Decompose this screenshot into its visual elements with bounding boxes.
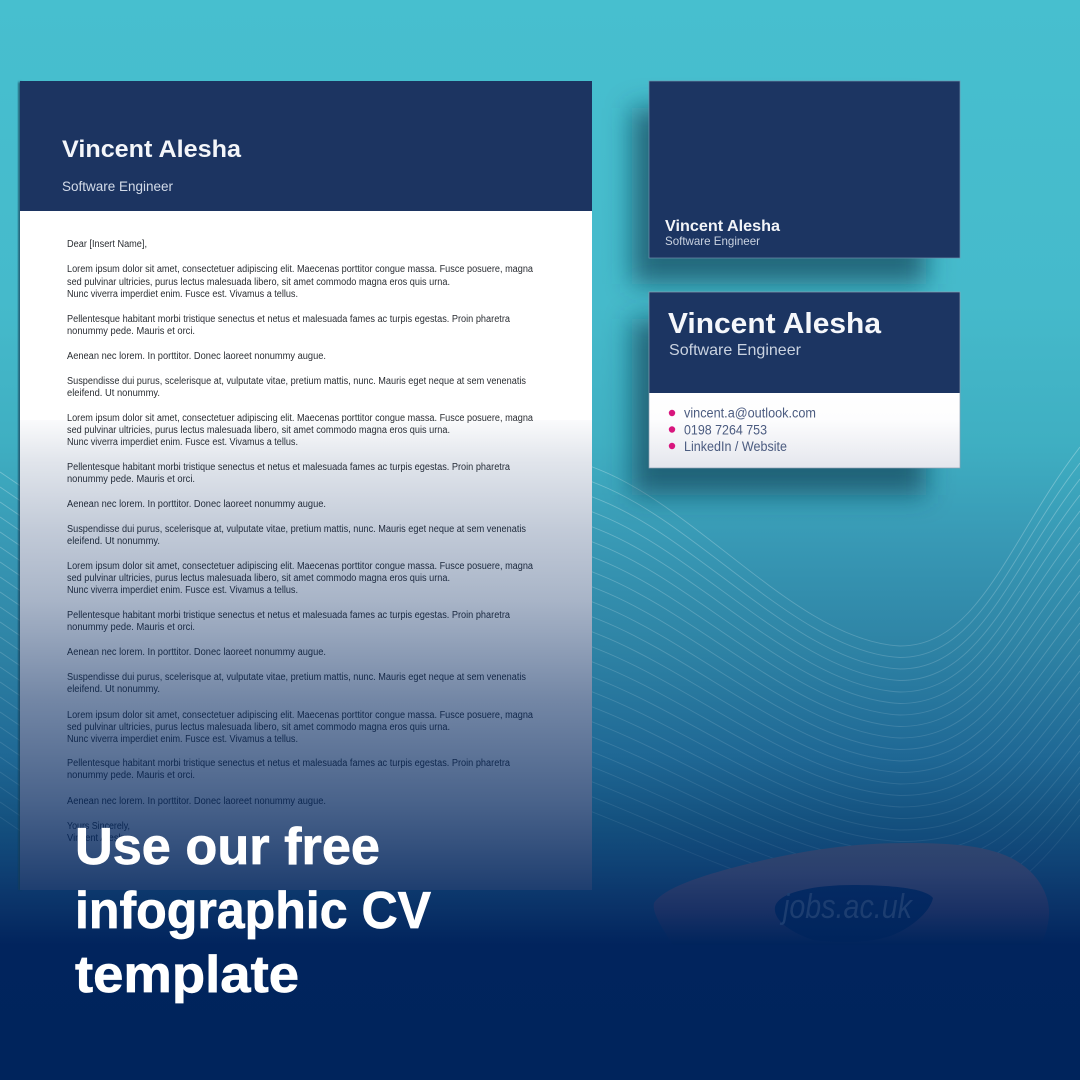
letter body text: eleifend. Ut nonummy.	[67, 388, 160, 399]
card header with name: Software Engineer	[669, 342, 802, 359]
contact list: vincent.a@outlook.com	[684, 406, 816, 420]
letter body text: Suspendisse dui purus, scelerisque at, vulputate vitae, pretium mattis, nunc. Mauris eget neque at sem venenatis	[67, 376, 526, 387]
card header with name: Vincent Alesha	[668, 308, 882, 340]
letter body text: Pellentesque habitant morbi tristique senectus et netus et malesuada fames ac turpis egestas. Proin pharetra	[67, 462, 511, 473]
title: infographic CV	[75, 882, 431, 940]
letter body text: Pellentesque habitant morbi tristique senectus et netus et malesuada fames ac turpis egestas. Proin pharetra	[67, 758, 511, 769]
letter body text: Pellentesque habitant morbi tristique senectus et netus et malesuada fames ac turpis egestas. Proin pharetra	[67, 314, 511, 325]
title: Use our free	[75, 818, 380, 876]
letter header band: Software Engineer	[62, 179, 173, 194]
letter body text: Aenean nec lorem. In porttitor. Donec laoreet nonummy augue.	[67, 796, 326, 807]
watermark logo: jobs.ac.uk: jobs.ac.uk	[780, 888, 914, 926]
contact list	[669, 406, 816, 454]
card header with name	[649, 292, 960, 393]
letter body text: Nunc viverra imperdiet enim. Fusce est. Vivamus a tellus.	[67, 289, 298, 300]
letter body text: nonummy pede. Mauris et orci.	[67, 622, 195, 633]
contact list: 0198 7264 753	[684, 422, 767, 438]
letter body text: nonummy pede. Mauris et orci.	[67, 770, 195, 781]
watermark logo: jobs.ac.uk	[654, 843, 1049, 945]
letter body text: Yours Sincerely,	[67, 821, 130, 832]
title: template	[75, 946, 299, 1004]
letter body text: Suspendisse dui purus, scelerisque at, vulputate vitae, pretium mattis, nunc. Mauris eget neque at sem venenatis	[67, 672, 526, 683]
letter body text: Vincent Alesha	[67, 833, 130, 844]
letter body text: Lorem ipsum dolor sit amet, consectetuer adipiscing elit. Maecenas porttitor congue massa. Fusce posuere, magna	[67, 264, 534, 275]
letter body text: sed pulvinar ultricies, purus lectus malesuada libero, sit amet commodo magna eros quis urna.	[67, 277, 450, 288]
letter body text: Lorem ipsum dolor sit amet, consectetuer adipiscing elit. Maecenas porttitor congue massa. Fusce posuere, magna	[67, 561, 534, 572]
letter body text: Nunc viverra imperdiet enim. Fusce est. Vivamus a tellus.	[67, 734, 298, 745]
letter header band: Vincent Alesha	[62, 136, 242, 163]
title	[75, 818, 431, 1004]
letter body text: Dear [Insert Name],	[67, 239, 147, 250]
panel: business card front: Vincent Alesha	[665, 218, 780, 235]
letter body text: Suspendisse dui purus, scelerisque at, vulputate vitae, pretium mattis, nunc. Mauris eget neque at sem venenatis	[67, 524, 526, 535]
letter header band	[20, 81, 592, 211]
letter body text: sed pulvinar ultricies, purus lectus malesuada libero, sit amet commodo magna eros quis urna.	[67, 722, 450, 733]
letter body text: Lorem ipsum dolor sit amet, consectetuer adipiscing elit. Maecenas porttitor congue massa. Fusce posuere, magna	[67, 710, 534, 721]
letter body text: Nunc viverra imperdiet enim. Fusce est. Vivamus a tellus.	[67, 585, 298, 596]
letter body text: Pellentesque habitant morbi tristique senectus et netus et malesuada fames ac turpis egestas. Proin pharetra	[67, 610, 511, 621]
letter body text: sed pulvinar ultricies, purus lectus malesuada libero, sit amet commodo magna eros quis urna.	[67, 425, 450, 436]
panel: business card front: Software Engineer	[665, 234, 760, 248]
letter body text: Aenean nec lorem. In porttitor. Donec laoreet nonummy augue.	[67, 351, 326, 362]
letter body text	[67, 239, 534, 844]
letter body text: nonummy pede. Mauris et orci.	[67, 326, 195, 337]
panel: business card front	[632, 81, 960, 284]
panel: cover letter page	[18, 81, 592, 890]
letter body text: Lorem ipsum dolor sit amet, consectetuer adipiscing elit. Maecenas porttitor congue massa. Fusce posuere, magna	[67, 413, 534, 424]
letter body text: eleifend. Ut nonummy.	[67, 536, 160, 547]
letter body text: Nunc viverra imperdiet enim. Fusce est. Vivamus a tellus.	[67, 437, 298, 448]
panel: business card back	[632, 292, 960, 495]
letter body text: Aenean nec lorem. In porttitor. Donec laoreet nonummy augue.	[67, 499, 326, 510]
contact list: LinkedIn / Website	[684, 439, 787, 454]
letter body text: nonummy pede. Mauris et orci.	[67, 474, 195, 485]
letter body text: sed pulvinar ultricies, purus lectus malesuada libero, sit amet commodo magna eros quis urna.	[67, 573, 450, 584]
letter body text: Aenean nec lorem. In porttitor. Donec laoreet nonummy augue.	[67, 647, 326, 658]
letter body text: eleifend. Ut nonummy.	[67, 684, 160, 695]
